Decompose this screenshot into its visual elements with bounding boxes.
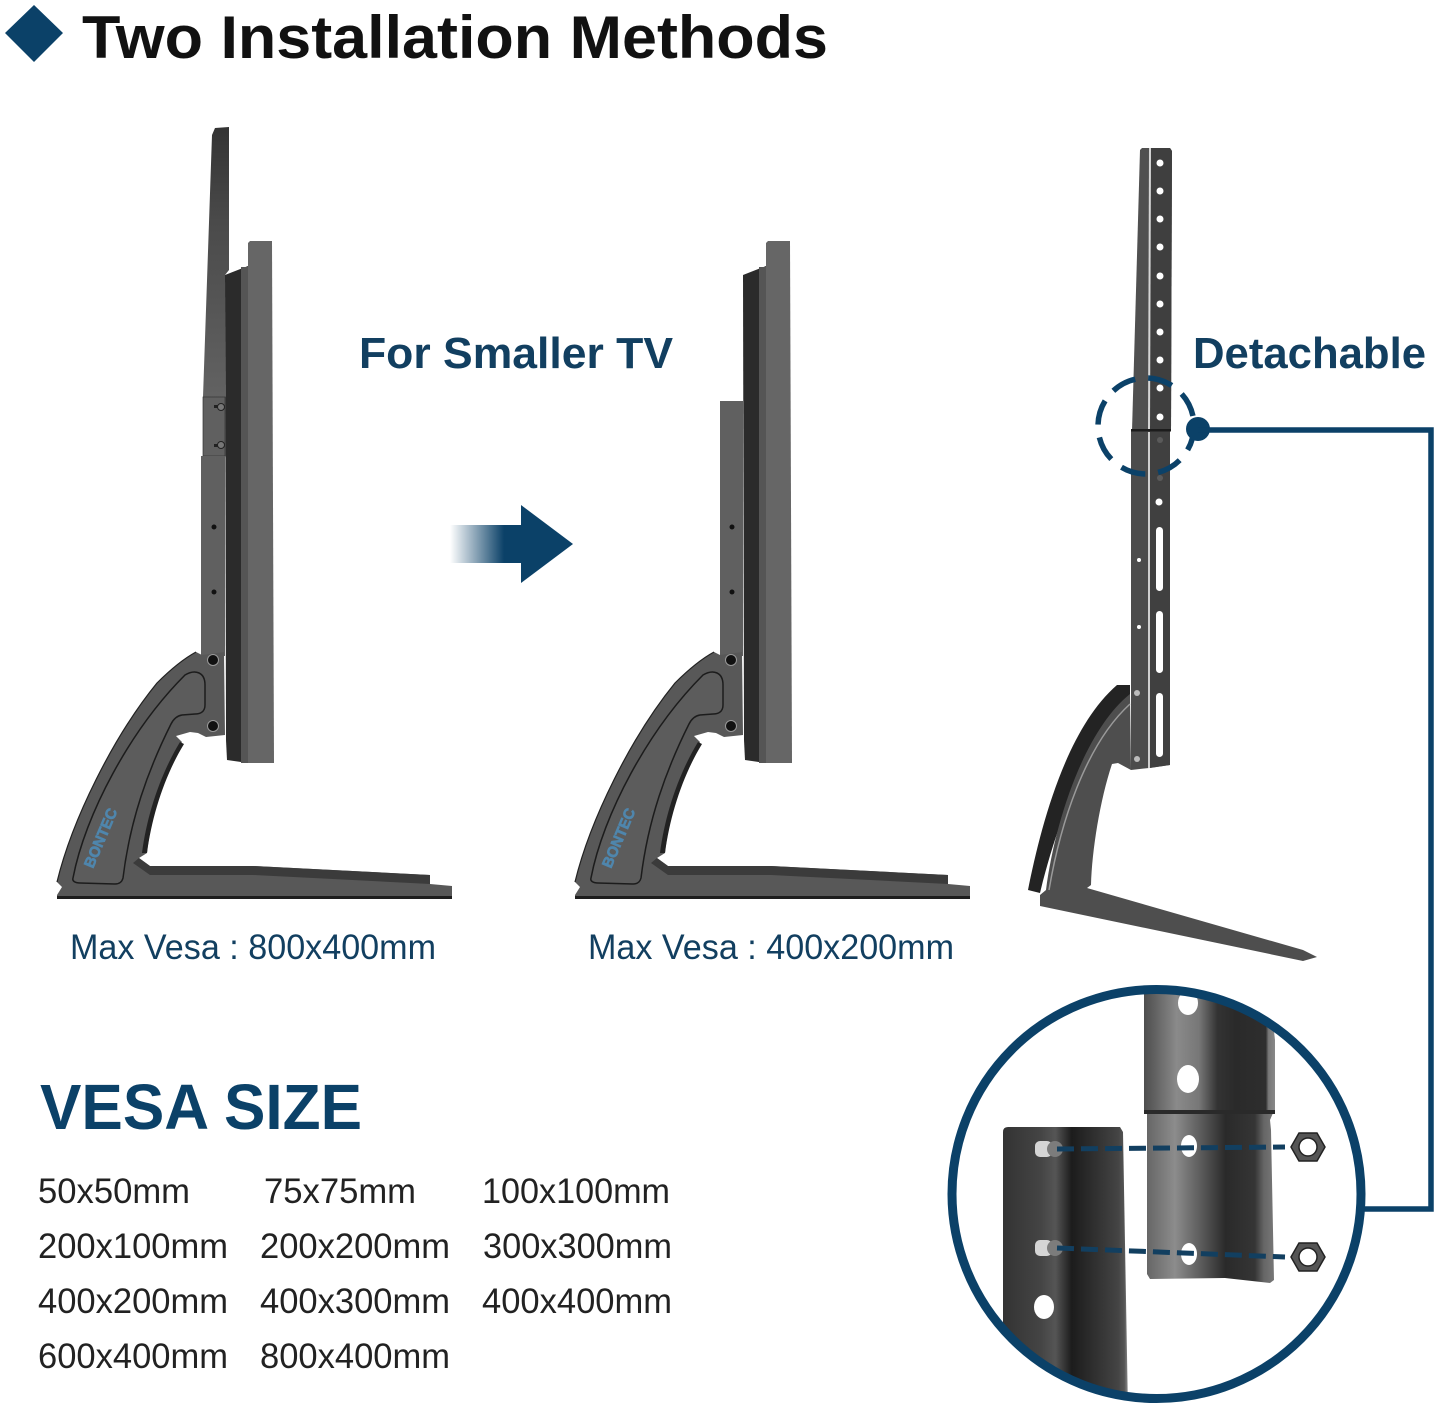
upper column holes (1156, 160, 1164, 420)
lower bracket plate (201, 456, 225, 656)
callout: connector line (1186, 417, 1431, 1209)
lower column highlight (1148, 432, 1150, 768)
arch outer edge (575, 652, 714, 882)
light column (766, 241, 792, 763)
stand: smaller TV configuration (575, 241, 970, 899)
label: for smaller TV: For Smaller TV (359, 329, 674, 378)
vesa size list (38, 1172, 672, 1376)
callout: dashed circle (1098, 378, 1194, 474)
vesa size list: 600x400mm (38, 1337, 228, 1376)
logo text: BONTEC (81, 806, 121, 871)
vesa size list: 75x75mm (264, 1172, 416, 1211)
lens ring (952, 990, 1361, 1398)
arrow (450, 505, 573, 583)
vesa size list: 100x100mm (482, 1172, 670, 1211)
dashed alignment lines (1057, 1147, 1285, 1257)
arch rear slot (660, 742, 702, 853)
lower column (1131, 431, 1170, 770)
hex nuts (1291, 1133, 1325, 1271)
upper bracket piece (1144, 994, 1275, 1110)
base top shade (133, 858, 430, 884)
stand: detachable side view (1028, 148, 1317, 961)
bracket holes (1034, 991, 1199, 1319)
title text: Two Installation Methods (82, 4, 828, 71)
upper column shaded side (1150, 148, 1172, 431)
column joint (1131, 429, 1171, 432)
threaded studs (1035, 1141, 1063, 1256)
upper column highlight (1148, 148, 1151, 430)
arch outer edge (57, 652, 196, 882)
stand arch and base (57, 652, 452, 899)
label: detachable: Detachable (1193, 329, 1426, 378)
detail lens (952, 980, 1361, 1408)
vesa size list: 300x300mm (483, 1227, 672, 1266)
logo text: BONTEC (599, 806, 639, 871)
vesa size list: 400x200mm (38, 1282, 228, 1321)
vesa size list: 400x400mm (482, 1282, 672, 1321)
stand arch and base (575, 652, 970, 899)
arch highlight (1049, 704, 1130, 890)
lens contents (1003, 980, 1325, 1408)
lower column holes and slots (1134, 437, 1163, 762)
upper column (1132, 148, 1172, 431)
stand: large TV configuration (57, 127, 452, 899)
dark column (225, 266, 248, 763)
arch inset panel (591, 672, 723, 884)
short bracket plate (720, 401, 743, 656)
mounting bolts (208, 654, 218, 732)
mounting bolts (726, 654, 736, 732)
vesa size list: 200x200mm (260, 1227, 450, 1266)
vesa size list: 50x50mm (38, 1172, 190, 1211)
lower bracket piece (1147, 1113, 1274, 1283)
arch outer dark shell (1028, 685, 1130, 893)
light column (248, 241, 274, 763)
tall upper bracket (203, 127, 229, 397)
arch rear slot (142, 742, 184, 853)
dark column (743, 266, 766, 763)
lower column shaded side (1150, 431, 1170, 768)
label: smaller TV vesa: Max Vesa : 400x200mm (588, 928, 954, 967)
vesa size list: 200x100mm (38, 1227, 228, 1266)
base top shade (651, 858, 948, 884)
icon: diamond bullet (5, 5, 63, 62)
heading: vesa size: VESA SIZE (40, 1071, 362, 1143)
label: large TV vesa: Max Vesa : 800x400mm (70, 928, 436, 967)
bolt block (203, 397, 225, 456)
title (5, 4, 828, 71)
arch inset panel (73, 672, 205, 884)
vesa size list: 400x300mm (260, 1282, 450, 1321)
left bracket piece (1003, 1127, 1128, 1408)
vesa size list: 800x400mm (260, 1337, 450, 1376)
arch body (1040, 694, 1317, 961)
